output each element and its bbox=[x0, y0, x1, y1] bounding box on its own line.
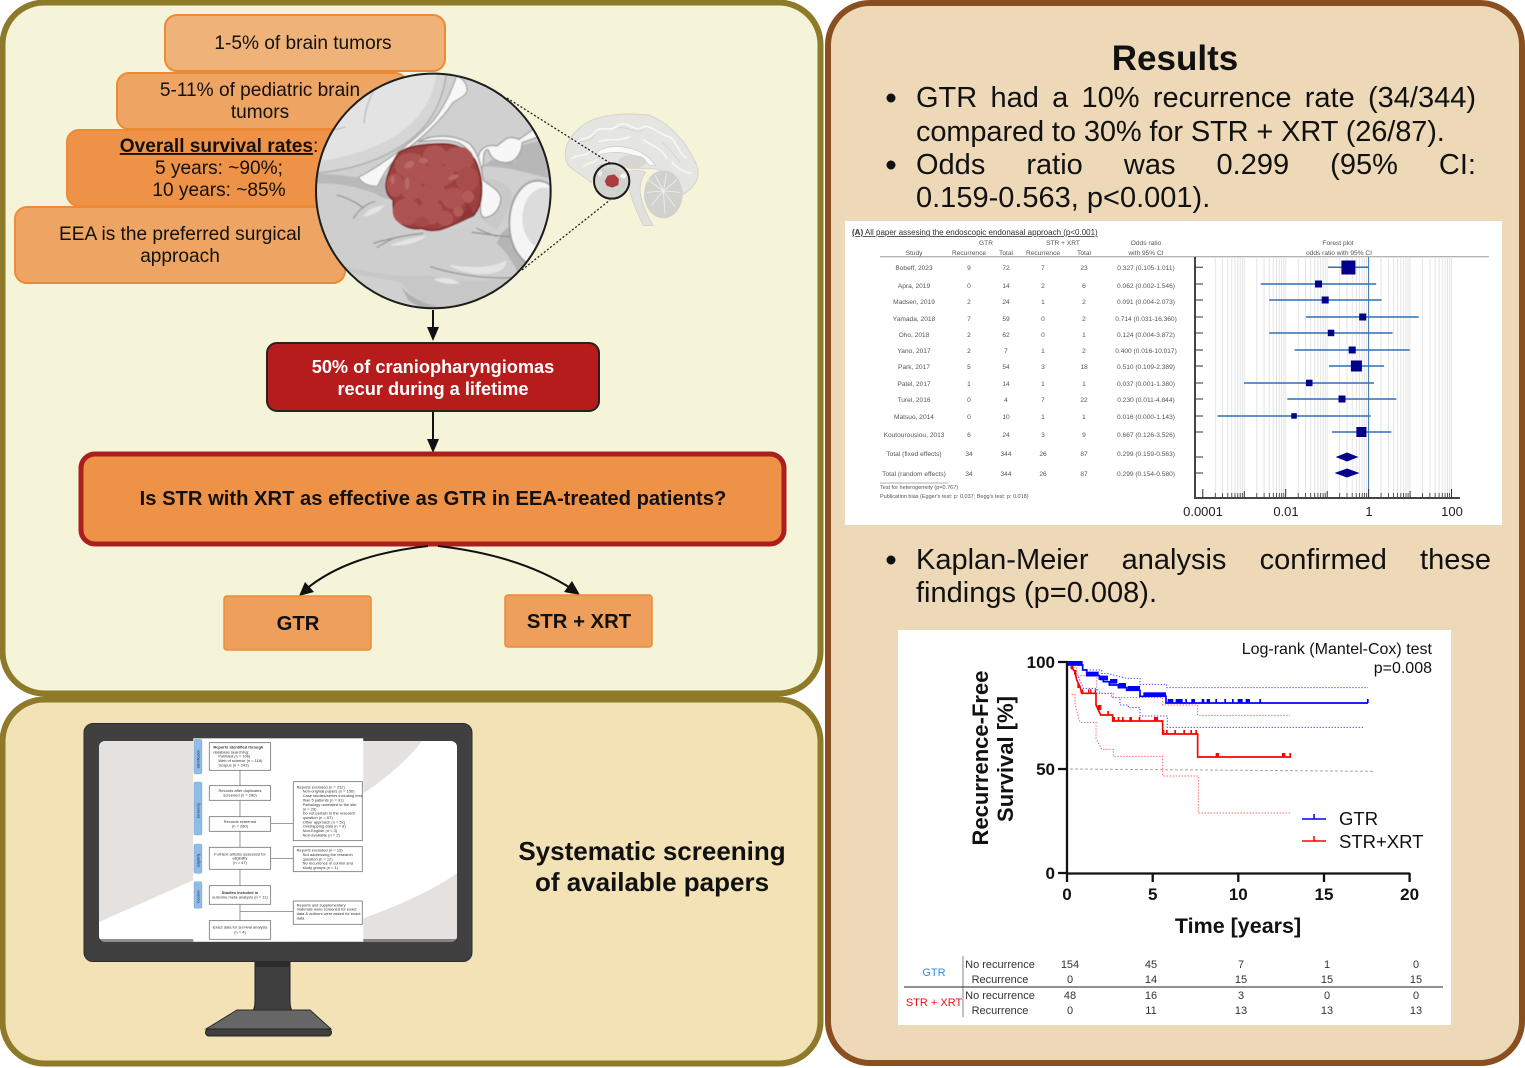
number at risk table: 16 bbox=[1145, 990, 1157, 1002]
forest plot table: 0.714 (0.031-16.360) bbox=[1115, 316, 1177, 323]
flow chart document: question (n = 57) bbox=[303, 815, 333, 820]
box: GTR: GTR bbox=[277, 613, 320, 635]
research question box: Is STR with XRT as effective as GTR in EEA-treated patients? bbox=[140, 488, 726, 510]
bullets bbox=[886, 94, 896, 564]
forest plot table: 5 bbox=[967, 364, 971, 371]
forest plot table: 7 bbox=[1004, 348, 1008, 355]
forest plot effect markers bbox=[1291, 260, 1366, 478]
forest plot table: 6 bbox=[967, 432, 971, 439]
flow chart document: question (n = 12) bbox=[303, 856, 333, 861]
flow chart document: Identification bbox=[196, 749, 200, 768]
number at risk table bbox=[904, 956, 1443, 1017]
text: Kaplan-Meier line 2: findings (p=0.008). bbox=[916, 577, 1157, 609]
forest plot table: Total bbox=[1077, 250, 1091, 257]
callout: recurrence rate: recur during a lifetime bbox=[337, 379, 529, 399]
box: overall survival rates: 10 years: ~85% bbox=[152, 180, 286, 201]
forest plot table: 1 bbox=[1041, 414, 1045, 421]
number at risk table: 13 bbox=[1410, 1005, 1422, 1017]
number at risk table: 45 bbox=[1145, 959, 1157, 971]
forest plot table: Apra, 2019 bbox=[898, 283, 930, 290]
number at risk table: No recurrence bbox=[965, 959, 1035, 971]
research question box bbox=[81, 454, 784, 544]
forest plot table: odds ratio with 95% CI bbox=[1306, 250, 1372, 257]
flow chart document: data bbox=[297, 915, 305, 920]
number at risk table: 15 bbox=[1321, 974, 1333, 986]
number at risk table: 15 bbox=[1235, 974, 1247, 986]
box: preferred surgical approach bbox=[15, 207, 345, 283]
forest plot table: STR + XRT bbox=[1046, 240, 1080, 247]
flow chart document: Non-English (n = 3) bbox=[303, 828, 338, 833]
forest plot table: 2 bbox=[967, 348, 971, 355]
forest plot table: 14 bbox=[1002, 283, 1010, 290]
forest plot table: Park, 2017 bbox=[898, 364, 930, 371]
forest plot table: Yamada, 2018 bbox=[893, 316, 936, 323]
panel: background and epidemiology bbox=[2, 2, 820, 694]
flow chart document: Records after duplicates bbox=[218, 788, 261, 793]
flow chart document: eligibility bbox=[232, 856, 248, 861]
x axis tick labels: 5 bbox=[1148, 885, 1157, 904]
y axis title bbox=[968, 671, 1018, 845]
number at risk table: 15 bbox=[1410, 974, 1422, 986]
forest plot table: 2 bbox=[1082, 316, 1086, 323]
number at risk table: 11 bbox=[1145, 1005, 1157, 1017]
forest plot table: 0 bbox=[967, 397, 971, 404]
number at risk table: 154 bbox=[1061, 959, 1079, 971]
y axis tick labels: 50 bbox=[1036, 760, 1055, 779]
forest plot axis labels bbox=[1183, 504, 1463, 519]
forest plot table bbox=[880, 240, 1372, 500]
box: preferred surgical approach: EEA is the preferred surgical bbox=[59, 224, 301, 245]
forest plot table: Oho, 2018 bbox=[899, 332, 930, 339]
curves bbox=[1067, 661, 1375, 813]
forest plot table: 24 bbox=[1002, 432, 1010, 439]
forest plot table: 0 bbox=[967, 283, 971, 290]
legend: STR+XRT bbox=[1339, 831, 1423, 852]
callout: recurrence rate: 50% of craniopharyngiomas bbox=[312, 357, 554, 377]
forest plot table: Madsen, 2019 bbox=[893, 299, 935, 306]
forest plot table: 1 bbox=[1041, 381, 1045, 388]
box: brain tumor share: 1-5% of brain tumors bbox=[214, 33, 392, 54]
number at risk table: No recurrence bbox=[965, 990, 1035, 1002]
forest plot table: 3 bbox=[1041, 432, 1045, 439]
flow chart document: than 5 patients (n = 91) bbox=[303, 797, 344, 802]
flow chart document: outcome meta-analysis (n = 11) bbox=[212, 894, 268, 899]
box: overall survival rates: 5 years: ~90%; bbox=[155, 158, 283, 179]
flow chart document: PubMed (n = 106) bbox=[218, 754, 251, 759]
flow chart document: (n = 280) bbox=[232, 823, 249, 828]
forest plot table: 3 bbox=[1041, 364, 1045, 371]
forest plot table: Study bbox=[906, 250, 923, 257]
axes bbox=[1058, 661, 1410, 882]
forest plot table: Recurrence bbox=[1026, 250, 1060, 257]
x axis tick labels bbox=[1062, 885, 1419, 904]
forest plot table: 26 bbox=[1039, 471, 1047, 478]
forest plot table: 2 bbox=[967, 299, 971, 306]
test annotation: p=0.008 bbox=[1374, 660, 1432, 677]
box: brain tumor share bbox=[165, 15, 445, 71]
legend bbox=[1302, 808, 1423, 852]
panel: results bbox=[828, 3, 1522, 1063]
flow chart document: Non-available (n = 2) bbox=[303, 832, 340, 837]
text: recurrence rate line 2: compared to 30% for STR + XRT (26/87). bbox=[916, 116, 1445, 148]
forest plot table: 0.400 (0.016-10.017) bbox=[1115, 348, 1177, 355]
flow chart document: Non-original papers (n = 150) bbox=[303, 789, 355, 794]
flow chart document: (n = 47) bbox=[233, 860, 248, 865]
text: systematic screening caption: Systematic screening bbox=[518, 836, 786, 866]
forest plot table: with 95% CI bbox=[1127, 250, 1164, 257]
illustration: brain tumor magnified bbox=[312, 70, 568, 313]
forest plot table: 9 bbox=[1082, 432, 1086, 439]
forest plot title: (A) All paper assesing the endoscopic endonasal approach (p<0.001) bbox=[852, 228, 1098, 237]
forest plot table: 0.062 (0.002-1.546) bbox=[1117, 283, 1175, 290]
forest plot axis labels: 0.0001 bbox=[1183, 504, 1223, 519]
forest plot table: 23 bbox=[1080, 265, 1088, 272]
number at risk table: Recurrence bbox=[972, 1005, 1028, 1017]
y axis title: Recurrence-Free bbox=[968, 671, 993, 845]
forest plot table: 2 bbox=[1041, 283, 1045, 290]
number at risk table: Recurrence bbox=[972, 974, 1028, 986]
forest plot table: 0.299 (0.159-0.563) bbox=[1117, 451, 1175, 458]
text: odds ratio line 2: 0.159-0.563, p<0.001). bbox=[916, 182, 1210, 214]
text: odds ratio line 1: Odds ratio was 0.299 (95% CI: bbox=[916, 149, 1476, 181]
number at risk table: 0 bbox=[1067, 974, 1073, 986]
text: Kaplan-Meier line 1: Kaplan-Meier analysis confirmed these bbox=[916, 544, 1491, 576]
forest plot table: 0.037 (0.001-1.380) bbox=[1117, 381, 1175, 388]
flow chart document: database searching: bbox=[213, 749, 249, 754]
number at risk table: 0 bbox=[1413, 959, 1419, 971]
forest plot table: 1 bbox=[1082, 381, 1086, 388]
arrow: recurrence to question bbox=[427, 412, 439, 453]
x axis tick labels: 10 bbox=[1229, 885, 1248, 904]
box: STR + XRT bbox=[505, 595, 652, 647]
y axis tick labels bbox=[1027, 653, 1055, 883]
forest plot table: 0.510 (0.109-2.389) bbox=[1117, 364, 1175, 371]
forest plot table: 7 bbox=[967, 316, 971, 323]
box: STR + XRT: STR + XRT bbox=[527, 611, 632, 633]
flow chart document: Reports and supplementary bbox=[297, 903, 346, 908]
forest plot table: 0 bbox=[1041, 332, 1045, 339]
forest plot table: 24 bbox=[1002, 299, 1010, 306]
forest plot axis labels: 1 bbox=[1365, 504, 1373, 519]
box: overall survival rates bbox=[67, 130, 347, 206]
y axis tick labels: 100 bbox=[1027, 653, 1055, 672]
flow chart document: Screening bbox=[196, 803, 200, 818]
text: recurrence rate line 1: GTR had a 10% recurrence rate (34/344) bbox=[916, 82, 1476, 114]
flow chart document: Case studies/series including less bbox=[303, 793, 362, 798]
number at risk table: 0 bbox=[1324, 990, 1330, 1002]
flow chart document: screened (n = 280) bbox=[223, 793, 257, 798]
forest plot table: 0.091 (0.004-2.073) bbox=[1117, 299, 1175, 306]
forest plot table: 1 bbox=[1041, 348, 1045, 355]
forest plot table: 34 bbox=[965, 471, 973, 478]
forest plot table: 0.230 (0.011-4.844) bbox=[1117, 397, 1175, 404]
forest plot table: 0 bbox=[1041, 316, 1045, 323]
y axis tick labels: 0 bbox=[1046, 864, 1055, 883]
box: GTR bbox=[224, 596, 371, 650]
x axis tick labels: 0 bbox=[1062, 885, 1072, 904]
flow chart document: (n = 4) bbox=[234, 929, 246, 934]
test annotation: Log-rank (Mantel-Cox) test bbox=[1242, 641, 1433, 658]
forest plot table: Total (random effects) bbox=[882, 471, 946, 478]
arrow: question to STR + XRT bbox=[438, 546, 580, 595]
chart: Kaplan-Meier curve bbox=[898, 630, 1451, 1025]
flow chart document: Web of science (n = 118) bbox=[218, 758, 263, 763]
flow chart document: Eligibility bbox=[196, 853, 200, 867]
flow chart document: Overlapping data (n = 8) bbox=[303, 824, 346, 829]
flow chart document: materials were screened for exact bbox=[297, 907, 357, 912]
forest plot table: 7 bbox=[1041, 397, 1045, 404]
number at risk table: 14 bbox=[1145, 974, 1157, 986]
forest plot table: Bobeff, 2023 bbox=[895, 265, 933, 272]
forest plot table: Publication bias (Egger's test: p: 0.037; Begg's test: p: 0.018) bbox=[880, 494, 1029, 500]
forest plot table: Yano, 2017 bbox=[897, 348, 931, 355]
forest plot table: 34 bbox=[965, 451, 973, 458]
forest plot table: 59 bbox=[1002, 316, 1010, 323]
callout: recurrence rate bbox=[267, 343, 599, 411]
flow chart document: Pathology unrelated to the site bbox=[303, 802, 357, 807]
flow chart document: Scopus (n = 243) bbox=[218, 762, 249, 767]
forest plot table: Test for heterogeneity (p=0.767) bbox=[880, 485, 958, 491]
forest plot axis labels: 0.01 bbox=[1273, 504, 1299, 519]
forest plot table: Patel, 2017 bbox=[897, 381, 931, 388]
number at risk table: 3 bbox=[1238, 990, 1244, 1002]
forest plot table: GTR bbox=[979, 240, 993, 247]
arrow: tumor to recurrence bbox=[427, 310, 439, 341]
flow chart document: Full-text articles assessed for bbox=[214, 851, 266, 856]
forest plot table: 87 bbox=[1080, 451, 1088, 458]
flow chart document: Reports identified through bbox=[213, 745, 264, 750]
flow chart document: data & authors were asked for exact bbox=[297, 911, 361, 916]
forest plot table: Forest plot bbox=[1322, 240, 1354, 247]
test annotation bbox=[1242, 641, 1433, 677]
forest plot table: 9 bbox=[967, 265, 971, 272]
x axis title: Time [years] bbox=[1175, 914, 1301, 938]
flow chart document: Do not pertain to the research bbox=[303, 811, 355, 816]
forest plot table: Odds ratio bbox=[1131, 240, 1162, 247]
forest plot table: 0.016 (0.000-1.143) bbox=[1117, 414, 1175, 421]
illustration: whole brain sagittal view bbox=[565, 114, 698, 226]
flow chart document: Records screened bbox=[224, 819, 256, 824]
number at risk table: 7 bbox=[1238, 959, 1244, 971]
flow chart document: Studies included in bbox=[222, 890, 259, 895]
number at risk table: STR + XRT bbox=[906, 997, 962, 1009]
legend: GTR bbox=[1339, 808, 1378, 829]
box: overall survival rates: Overall survival rates: bbox=[120, 136, 318, 157]
chart: forest plot bbox=[845, 221, 1502, 525]
y axis title: Survival [%] bbox=[993, 696, 1018, 822]
forest plot table: Total (fixed effects) bbox=[886, 451, 942, 458]
forest plot table: 0.299 (0.154-0.580) bbox=[1117, 471, 1175, 478]
text: systematic screening caption: of available papers bbox=[535, 867, 769, 897]
forest plot table: Matsuo, 2014 bbox=[894, 414, 934, 421]
flow chart document bbox=[193, 738, 363, 942]
forest plot table: 344 bbox=[1000, 471, 1012, 478]
forest plot table: 7 bbox=[1041, 265, 1045, 272]
forest plot table: 1 bbox=[967, 381, 971, 388]
forest plot table: 62 bbox=[1002, 332, 1010, 339]
flow chart document: study groups (n = 1) bbox=[303, 865, 339, 870]
number at risk table: 13 bbox=[1321, 1005, 1333, 1017]
forest plot table: 87 bbox=[1080, 471, 1088, 478]
forest plot table: 0.667 (0.126-3.526) bbox=[1117, 432, 1175, 439]
box: pediatric share: tumors bbox=[231, 102, 289, 123]
forest plot axis labels: 100 bbox=[1441, 504, 1463, 519]
flow chart document: Not addressing the research bbox=[303, 852, 353, 857]
flow chart document: Inclusion bbox=[196, 890, 200, 903]
forest plot table: 10 bbox=[1002, 414, 1010, 421]
number at risk table: 13 bbox=[1235, 1005, 1247, 1017]
forest plot axes and grid bbox=[1195, 257, 1460, 498]
forest plot table: 2 bbox=[967, 332, 971, 339]
forest plot table: 344 bbox=[1000, 451, 1012, 458]
forest plot table: 22 bbox=[1080, 397, 1088, 404]
forest plot table: 2 bbox=[1082, 348, 1086, 355]
flow chart document: Exact data for survival analysis bbox=[213, 925, 267, 930]
x axis tick labels: 20 bbox=[1400, 885, 1419, 904]
flow chart document: Reports excluded (n = 212) bbox=[297, 784, 345, 789]
forest plot table: Koutourousiou, 2013 bbox=[884, 432, 945, 439]
forest plot table: Turel, 2016 bbox=[897, 397, 931, 404]
panel: systematic screening bbox=[2, 700, 820, 1064]
forest plot table: Total bbox=[999, 250, 1013, 257]
forest plot table: 26 bbox=[1039, 451, 1047, 458]
heading: results: Results bbox=[1112, 39, 1238, 78]
arrow: question to GTR bbox=[299, 546, 428, 596]
forest plot table: 18 bbox=[1080, 364, 1088, 371]
flow chart document: No recurrence in control and bbox=[303, 861, 353, 866]
number at risk table: 0 bbox=[1413, 990, 1419, 1002]
box: pediatric share bbox=[117, 73, 407, 129]
number at risk table: 48 bbox=[1064, 990, 1076, 1002]
tumor mass bbox=[386, 144, 482, 230]
forest plot table: 0.124 (0.004-3.872) bbox=[1117, 332, 1175, 339]
flow chart document: Other approach (n = 5x) bbox=[303, 819, 346, 824]
forest plot table: 0 bbox=[967, 414, 971, 421]
forest plot table: 4 bbox=[1004, 397, 1008, 404]
icon: monitor with PRISMA flow chart bbox=[84, 724, 472, 1036]
number at risk table: GTR bbox=[922, 967, 946, 979]
dotted zoom lines bbox=[507, 98, 610, 270]
number at risk table: 1 bbox=[1324, 959, 1330, 971]
flow chart document: Reports excluded (n = 13) bbox=[297, 848, 343, 853]
forest plot table: 0.327 (0.105-1.011) bbox=[1117, 265, 1175, 272]
forest plot confidence intervals bbox=[1218, 267, 1419, 432]
box: preferred surgical approach: approach bbox=[140, 246, 220, 267]
forest plot table: 14 bbox=[1002, 381, 1010, 388]
forest plot table: 1 bbox=[1041, 299, 1045, 306]
flow chart document: (n = 29) bbox=[303, 806, 317, 811]
number at risk table: 0 bbox=[1067, 1005, 1073, 1017]
forest plot table: 72 bbox=[1002, 265, 1010, 272]
forest plot table: 6 bbox=[1082, 283, 1086, 290]
forest plot table: 1 bbox=[1082, 332, 1086, 339]
forest plot table: 1 bbox=[1082, 414, 1086, 421]
forest plot table: Recurrence bbox=[952, 250, 986, 257]
box: pediatric share: 5-11% of pediatric brain bbox=[160, 80, 360, 101]
forest plot table: 2 bbox=[1082, 299, 1086, 306]
forest plot table: 54 bbox=[1002, 364, 1010, 371]
x axis tick labels: 15 bbox=[1315, 885, 1333, 904]
